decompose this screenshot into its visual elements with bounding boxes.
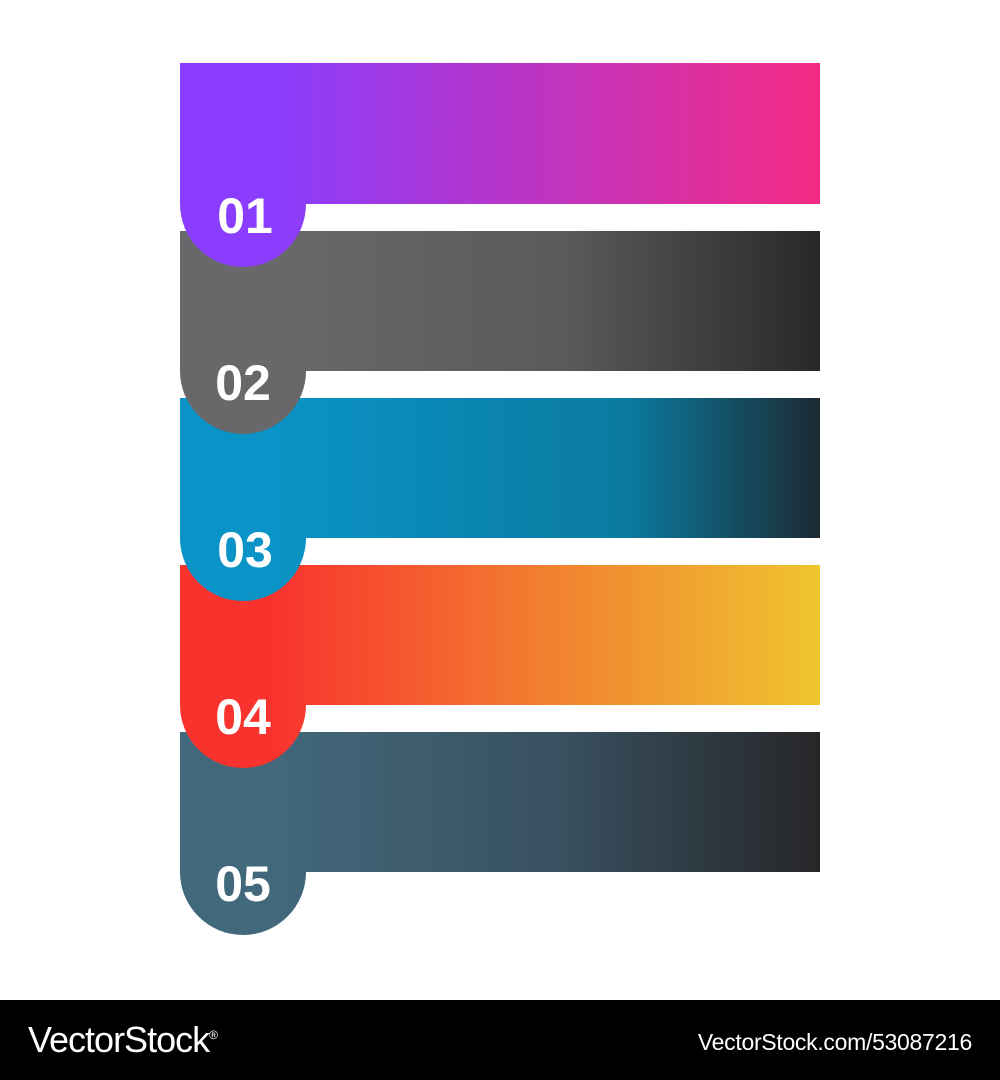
- step 02: [180, 231, 820, 434]
- step 05: [180, 732, 820, 935]
- step 01: [180, 63, 820, 267]
- footer: [0, 1000, 1000, 1080]
- step 01: 01: [217, 188, 273, 244]
- step 02: 02: [215, 355, 271, 411]
- step 03: 03: [217, 522, 273, 578]
- footer id: VectorStock.com/53087216: [698, 1029, 972, 1055]
- step 05: 05: [215, 856, 271, 912]
- step 03: [180, 398, 820, 601]
- step 04: [180, 565, 820, 768]
- step 04: 04: [215, 689, 271, 745]
- footer brand: VectorStock®: [28, 1019, 217, 1060]
